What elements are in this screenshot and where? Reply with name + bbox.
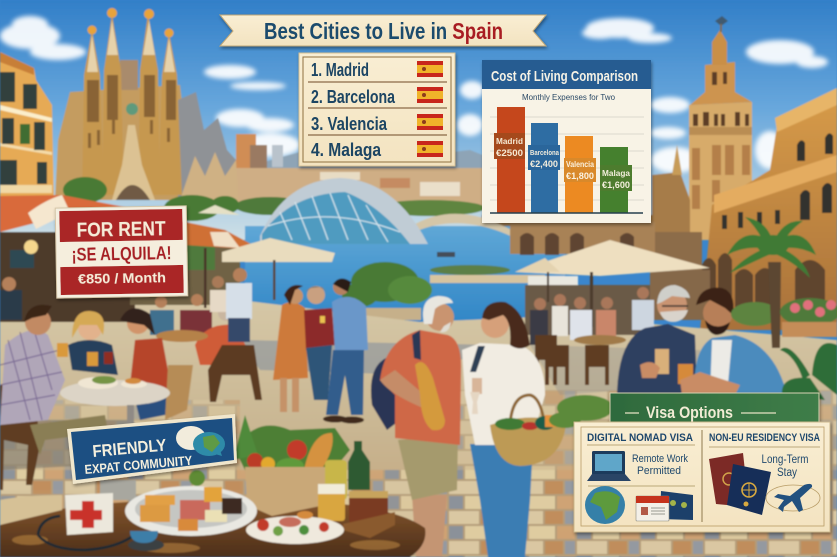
cafe backdrop (0, 232, 650, 335)
list item: Madrid: 1. Madrid (311, 60, 369, 80)
list item: Valencia: 3. Valencia (311, 114, 388, 134)
icon: globe (585, 486, 625, 524)
bar label: Madrid (494, 133, 525, 159)
bar label: Malaga: Malaga (602, 168, 630, 178)
landmark: La Giralda tower (689, 16, 752, 240)
text: remote work permitted: Permitted (637, 465, 681, 477)
rent price: €850 / Month (78, 269, 166, 287)
panel: visa options (574, 393, 830, 532)
bar label: Valencia: Valencia (566, 160, 594, 169)
friendly sign post (100, 480, 136, 500)
palm trees and flowers (727, 217, 837, 400)
visa heading (610, 393, 819, 425)
visa corner plants (549, 395, 613, 428)
sign heading: for rent: FOR RENT (76, 218, 166, 242)
icon: blue passport (727, 464, 771, 515)
grocery box with vegetables (233, 415, 350, 516)
visa heading: Visa Options (646, 404, 733, 422)
bar label: Malaga: €1,600 (602, 180, 630, 191)
icon: map cards (636, 491, 693, 521)
large tapas plate (125, 470, 257, 536)
panel: ranked city list (299, 53, 455, 166)
distant hills and city (235, 134, 652, 233)
icon: Spanish flag 1 (417, 61, 443, 77)
sign subheading: se alquila: ¡SE ALQUILA! (71, 243, 172, 265)
Oceanografic dome (260, 178, 428, 244)
title banner (220, 15, 546, 46)
background cafe guests (0, 268, 654, 402)
text: remote work permitted: Remote Work (632, 453, 688, 465)
midground trees (63, 177, 432, 320)
bar label: Valencia (564, 158, 596, 182)
umbrellas (0, 195, 710, 327)
bar chart (490, 107, 643, 213)
icon: speech bubbles with globe (176, 426, 225, 456)
digital nomad visa column (585, 432, 695, 524)
chart subtitle: Monthly Expenses for Two (522, 92, 615, 102)
sign: friendly expat community (67, 414, 237, 484)
non-EU residency visa column (709, 432, 820, 515)
sign: for rent (55, 206, 188, 298)
icon: Spanish flag 4 (417, 141, 443, 157)
sign text: friendly: FRIENDLY (92, 436, 168, 461)
bar label: Madrid: €2500 (496, 148, 523, 159)
list item: Barcelona: 2. Barcelona (311, 87, 396, 107)
cafe table with three friends (0, 305, 193, 490)
plaza ground (0, 300, 837, 557)
bar label: Malaga (600, 165, 632, 191)
bar label: Valencia: €1,800 (566, 171, 594, 182)
list item: Malaga: 4. Malaga (311, 140, 382, 160)
olive oil bottles and jars (318, 441, 395, 538)
icon: Spanish flag 2 (417, 87, 443, 103)
central man with backpack and baguette (371, 296, 461, 557)
icon: red passport (709, 453, 746, 505)
text: long-term stay (762, 454, 808, 479)
text: long-term stay: Long-Term (762, 454, 808, 466)
central woman with basket (462, 302, 566, 557)
group of three standing friends (273, 278, 368, 424)
bar label: Barcelona: €2,400 (530, 159, 558, 170)
clouds (0, 16, 828, 173)
chart header: Cost of Living Comparison (491, 68, 638, 85)
text: remote work permitted (632, 453, 688, 477)
two men with coffee cups (617, 285, 787, 395)
foreground wooden table (0, 495, 425, 557)
health card and stethoscope (38, 493, 164, 551)
icon: airplane (766, 484, 820, 512)
panel: cost of living comparison chart (482, 60, 651, 223)
bar label: Barcelona: Barcelona (530, 148, 560, 157)
digital nomad visa column: DIGITAL NOMAD VISA (587, 432, 693, 444)
sky (0, 0, 837, 240)
sign text: expat community: EXPAT COMMUNITY (84, 453, 193, 477)
left apartment building (0, 52, 54, 208)
bar label: Barcelona (528, 145, 560, 170)
landmark: Sagrada Familia (55, 8, 238, 200)
text: long-term stay: Stay (777, 467, 797, 479)
icon: laptop (587, 451, 631, 481)
bar label: Madrid: Madrid (496, 136, 523, 146)
Seville palace (650, 88, 837, 330)
small food plate (246, 511, 344, 544)
title text: Best Cities to Live in Spain (264, 18, 503, 44)
icon: Spanish flag 3 (417, 114, 443, 130)
water and bridge (245, 214, 655, 326)
chart header (482, 60, 651, 89)
